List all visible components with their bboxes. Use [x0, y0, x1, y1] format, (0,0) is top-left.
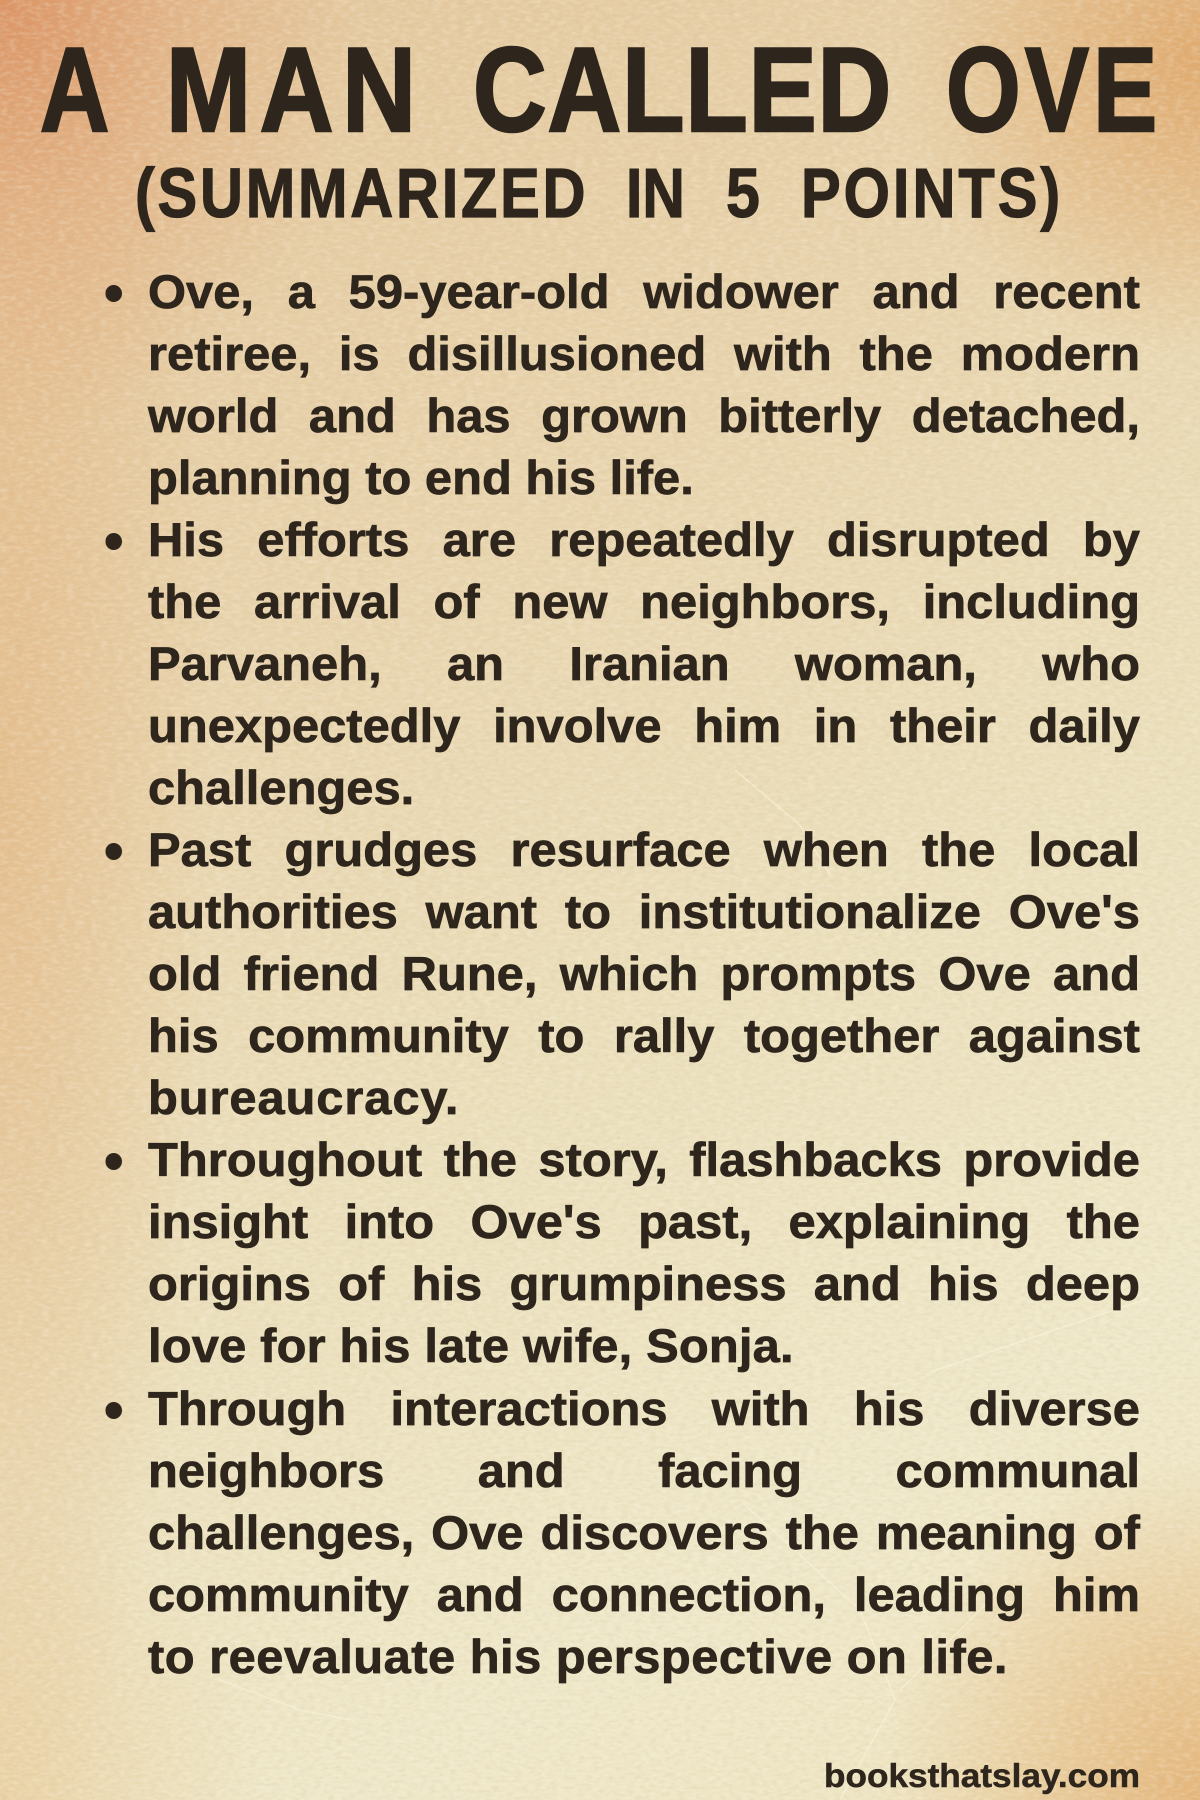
point 5: community: neighbors and facing communal: [148, 1444, 1140, 1497]
main heading: CALLED: [473, 22, 891, 157]
point 4: flashbacks: origins of his grumpiness and his deep: [148, 1257, 1140, 1310]
point 2: new neighbors: unexpectedly involve him in their daily: [148, 699, 1140, 752]
main heading: A: [40, 24, 109, 158]
subheading: 5: [726, 154, 760, 232]
main heading: MAN: [166, 22, 416, 157]
subheading: (SUMMARIZED: [135, 153, 586, 232]
point 3: past grudges: authorities want to institutionalize Ove's: [148, 885, 1140, 938]
point 5: community: to reevaluate his perspective on life.: [148, 1630, 1008, 1683]
point 2: new neighbors: His efforts are repeatedly disrupted by: [148, 513, 1140, 566]
subheading: IN: [626, 153, 685, 232]
point 4: flashbacks: [106, 1133, 1140, 1372]
point 4: flashbacks: love for his late wife, Sonja.: [148, 1319, 794, 1372]
point 1: Ove's disillusionment: [105, 265, 1140, 1418]
point 1: Ove's disillusionment: Ove, a 59-year-old widower and recent: [148, 265, 1140, 318]
point 2: new neighbors: Parvaneh, an Iranian woman, who: [148, 637, 1140, 690]
point 5: community: [106, 1382, 1140, 1684]
bullet list: [106, 265, 1140, 1684]
main heading: [40, 22, 1157, 158]
subheading: POINTS): [801, 153, 1060, 232]
point 4: flashbacks: Throughout the story, flashbacks provide: [148, 1133, 1140, 1186]
point 1: Ove's disillusionment: retiree, is disillusioned with the modern: [148, 327, 1140, 380]
point 5: community: challenges, Ove discovers the meaning of: [148, 1506, 1140, 1559]
point 2: new neighbors: [106, 513, 1140, 814]
title: [40, 22, 1157, 232]
point 3: past grudges: [106, 823, 1140, 1124]
point 5: community: Through interactions with his diverse: [148, 1382, 1140, 1435]
point 2: new neighbors: challenges.: [148, 761, 414, 814]
point 3: past grudges: Past grudges resurface when the local: [148, 823, 1140, 876]
footer website: booksthatslay.com: [824, 1757, 1140, 1794]
point 1: Ove's disillusionment: world and has grown bitterly detached,: [148, 389, 1140, 442]
point 3: past grudges: bureaucracy.: [148, 1071, 459, 1124]
point 1: Ove's disillusionment: planning to end his life.: [148, 451, 694, 504]
point 4: flashbacks: insight into Ove's past, explaining the: [148, 1195, 1140, 1248]
main heading: OVE: [946, 24, 1157, 158]
point 5: community: community and connection, leading him: [148, 1568, 1140, 1621]
point 3: past grudges: his community to rally together against: [148, 1009, 1140, 1062]
point 2: new neighbors: the arrival of new neighbors, including: [148, 575, 1140, 628]
subheading: [135, 153, 1060, 232]
point 3: past grudges: old friend Rune, which prompts Ove and: [148, 947, 1140, 1000]
